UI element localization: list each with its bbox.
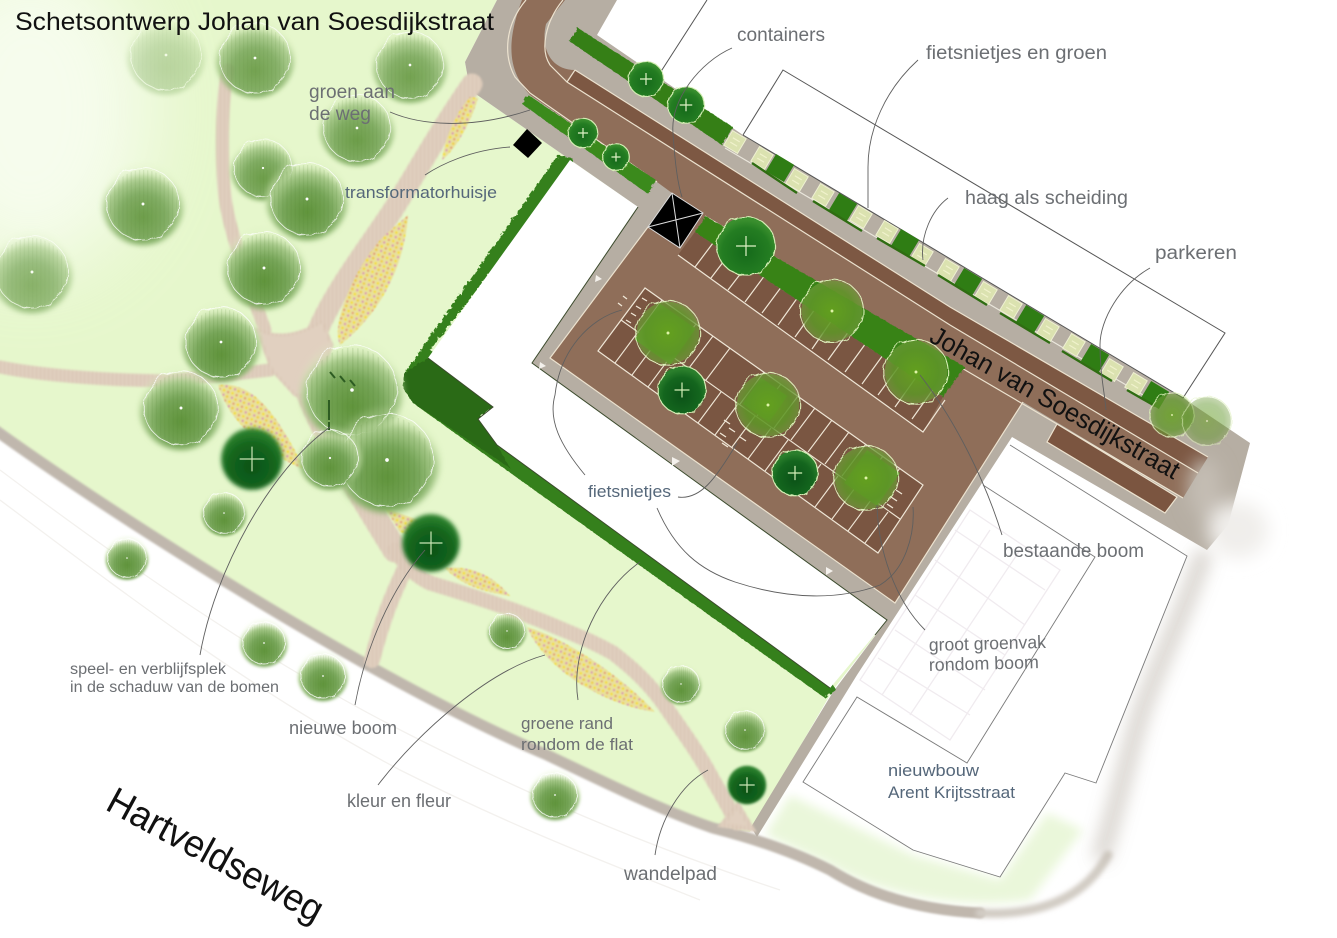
footpaths (0, 70, 752, 829)
faint floor plan of new building (860, 510, 1060, 740)
label: nieuwbouw Arent Krijtsstraat: Arent Krijtsstraat (888, 783, 1015, 802)
label: nieuwbouw Arent Krijtsstraat (888, 761, 1015, 802)
label: bestaande boom: bestaande boom (1003, 541, 1144, 562)
label: parkeren: parkeren (1155, 243, 1237, 264)
leader lines (200, 48, 1150, 855)
label: speel- en verblijfsplek: in de schaduw van de bomen (70, 679, 279, 696)
label: street name: Johan van Soesdijkstraat (925, 320, 1186, 485)
label: haag als scheiding: haag als scheiding (965, 188, 1128, 209)
lawn fade top left (0, 0, 150, 270)
label: groen aan de weg: de weg (309, 104, 371, 125)
bicycle racks and hedge blocks (724, 131, 1169, 409)
parking island (598, 288, 923, 553)
label: transformatorhuisje: transformatorhuisje (345, 183, 497, 202)
label: nieuwe boom: nieuwe boom (289, 718, 397, 738)
trees: street (568, 62, 775, 275)
label: fietsnietjes en groen: fietsnietjes en groen (926, 43, 1107, 64)
faint road drawing: Hartveldseweg (0, 470, 780, 900)
label: groen aan de weg (309, 82, 395, 125)
black transformer house (513, 129, 542, 158)
dark hedge corner (403, 358, 510, 468)
road edge: Hartveldseweg side (0, 430, 980, 913)
hedge: street west (522, 95, 656, 194)
label: groene rand rondom de flat (521, 714, 633, 754)
hedge around flat (403, 155, 836, 698)
label: speel- en verblijfsplek (70, 661, 279, 696)
label: road name: Hartveldseweg (100, 780, 331, 931)
label: groene rand rondom de flat: rondom de flat (521, 735, 633, 754)
planting squares under parking trees (634, 303, 900, 506)
triangles at flat entrance (539, 275, 833, 575)
label: fietsnietjes: fietsnietjes (588, 482, 671, 501)
building outlines north (660, 0, 1225, 398)
bicycle racks on island (618, 296, 902, 508)
road edge: blurred east side (1100, 550, 1205, 860)
road fade at east end (1189, 458, 1268, 558)
road outlines (508, 0, 1208, 603)
label: groot groenvak rondom boom (929, 632, 1047, 675)
containers (648, 193, 703, 248)
trees: new dark trees (221, 428, 766, 804)
label: groene rand rondom de flat: groene rand (521, 714, 613, 733)
hedge: street north (569, 28, 733, 145)
street and parking square surface (511, 0, 1208, 603)
hedge: parking north (695, 216, 965, 397)
building: flat (428, 160, 887, 688)
title: Schetsontwerp Johan van Soesdijkstraat (15, 8, 494, 36)
flat outlines (428, 207, 887, 688)
label: speel- en verblijfsplek: speel- en verblijfsplek (70, 661, 226, 678)
label: groot groenvak rondom boom: rondom boom (929, 652, 1039, 675)
road edge: fading east part (980, 855, 1108, 913)
label: groot groenvak rondom boom: groot groenvak (929, 632, 1047, 655)
parking strip along street (567, 70, 1208, 473)
lawn: lower right strip (765, 795, 1083, 903)
trees: park (0, 15, 767, 820)
paving: grey road surface (465, 0, 1250, 837)
label: containers: containers (737, 25, 825, 46)
playground marks under trees (329, 372, 355, 430)
parking strip at street end (1047, 424, 1177, 513)
new building outline (803, 445, 1187, 877)
label: kleur en fleur: kleur en fleur (347, 791, 451, 811)
label: groen aan de weg: groen aan (309, 82, 395, 103)
label: wandelpad: wandelpad (623, 864, 717, 885)
parking row north (678, 232, 945, 432)
flower beds (218, 97, 655, 712)
label: nieuwbouw Arent Krijtsstraat: nieuwbouw (888, 761, 980, 780)
trees: parking (636, 280, 1232, 510)
lawn (0, 0, 887, 832)
